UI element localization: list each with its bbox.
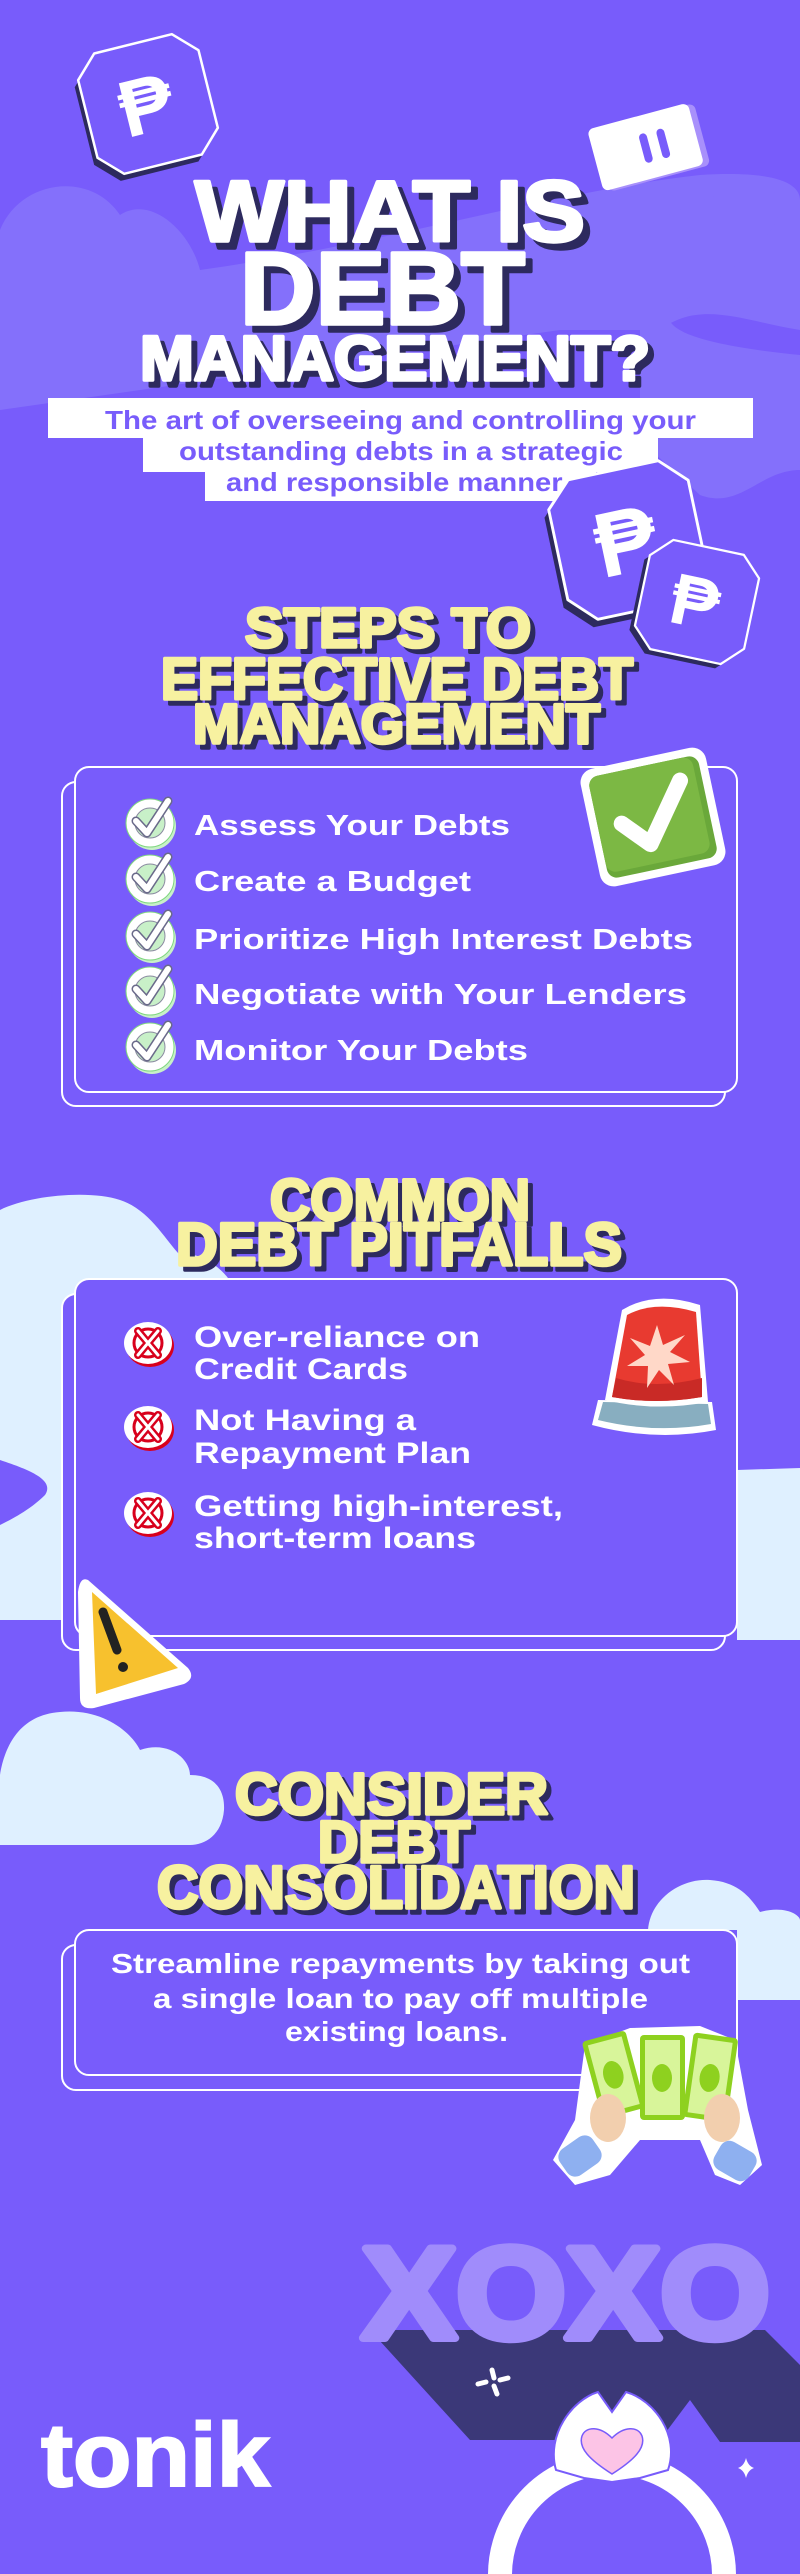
icon: coin top-left [68,29,225,186]
icon: coin small: ₱ [663,559,728,647]
panel: consolidation [62,1930,737,2090]
steps list: Prioritize High Interest Debts [194,924,693,956]
icon: big checkmark [578,745,728,889]
subtitle: outstanding debts in a strategic [179,436,623,466]
icon: coin top-left: ₱ [110,55,183,155]
background clouds (pale blue) [0,1195,800,1640]
title: MANAGEMENT? [146,330,656,400]
heading: steps: MANAGEMENT [193,692,600,755]
title: MANAGEMENT? [140,324,650,394]
heading: pitfalls: COMMON [270,1168,530,1233]
heading: steps: EFFECTIVE DEBT [166,652,638,717]
panel: steps [62,745,737,1106]
heading: pitfalls: COMMON [275,1173,535,1238]
heading: consolidation: DEBT [323,1815,475,1880]
subtitle [48,398,753,501]
panel: pitfalls [62,1279,737,1650]
icon: siren [592,1299,716,1435]
heading: pitfalls [176,1168,627,1283]
consolidation text: existing loans. [285,2016,508,2047]
title [140,164,656,400]
icon: diamond sparkle [738,2458,754,2478]
icon: heart hands ring [500,2392,724,2574]
steps list: Create a Budget [194,866,471,898]
heading: steps: EFFECTIVE DEBT [161,647,633,712]
pitfalls list: Not Having a [194,1404,416,1437]
heading: consolidation: DEBT [318,1810,470,1875]
heading: consolidation: CONSIDER [235,1762,548,1827]
heading: steps: STEPS TO [245,596,531,659]
decoration: XOXO: XOXO [362,2220,770,2366]
heading: pitfalls: DEBT PITFALLS [181,1216,627,1283]
subtitle: and responsible manner. [226,467,569,497]
pitfalls list: Repayment Plan [194,1437,471,1470]
background clouds (light purple) [0,174,800,498]
icon: coin big: ₱ [585,485,667,598]
title: DEBT [240,231,525,346]
heading: steps: MANAGEMENT [198,697,605,760]
steps list [126,799,693,1074]
heading: pitfalls: DEBT PITFALLS [176,1211,622,1278]
consolidation text: Streamline repayments by taking out [111,1948,690,1979]
heading: consolidation: CONSOLIDATION [157,1854,635,1921]
icon: white block top-right [587,101,710,193]
heading: consolidation: CONSIDER [240,1767,553,1832]
heading: steps: STEPS TO [250,601,536,664]
icon: coin small [625,535,763,673]
title: WHAT IS [195,164,585,260]
consolidation text [111,1948,690,2047]
steps list: Assess Your Debts [194,810,510,842]
heading: consolidation: CONSOLIDATION [162,1859,640,1926]
cloud left [0,1712,224,1845]
icon: coin big [538,455,714,633]
decoration: XOXO [362,2220,800,2442]
cloud right [648,1880,800,2000]
steps list: Monitor Your Debts [194,1035,528,1067]
title: DEBT [247,238,532,353]
heading: steps [161,596,638,760]
heading: consolidation [157,1762,640,1926]
consolidation text: a single loan to pay off multiple [153,1983,648,2014]
title: WHAT IS [202,171,592,267]
subtitle: The art of overseeing and controlling your [105,405,696,435]
steps list: Negotiate with Your Lenders [194,979,687,1011]
pitfalls list: Getting high-interest, [194,1490,563,1523]
pitfalls list [124,1321,563,1555]
logo: tonik: tonik [41,2406,271,2506]
pitfalls list: Credit Cards [194,1353,408,1386]
icon: sparkle [478,2370,508,2394]
icon: hands with money [553,2026,762,2185]
pitfalls list: Over-reliance on [194,1321,480,1354]
icon: warning triangle [78,1579,191,1708]
pitfalls list: short-term loans [194,1522,476,1555]
